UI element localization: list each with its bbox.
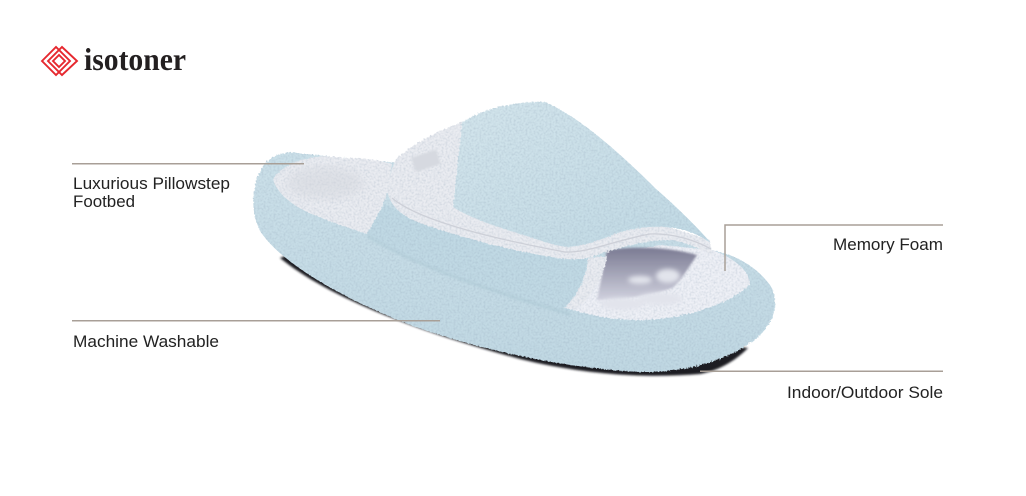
label: Luxurious Pillowstep <box>73 174 230 193</box>
leader line <box>725 225 943 271</box>
blue foam base <box>253 152 775 372</box>
heel footbed shading <box>287 167 363 199</box>
label: Indoor/Outdoor Sole <box>787 383 943 402</box>
embossed strap logo <box>411 150 441 172</box>
black outsole <box>280 250 748 376</box>
strap piping <box>392 198 711 252</box>
slipper illustration <box>253 102 775 376</box>
label: Machine Washable <box>73 332 219 351</box>
leader line <box>700 370 943 372</box>
callout: Luxurious Pillowstep Footbed <box>72 163 304 211</box>
upper strap white lining <box>387 122 712 259</box>
label second line: Footbed <box>73 192 135 211</box>
wordmark: isotoner <box>84 41 186 77</box>
strap edge to opening <box>564 256 607 310</box>
logo: isotoner <box>42 41 186 77</box>
heel footbed <box>273 156 392 234</box>
lower strap bottom shadow <box>367 236 570 314</box>
upper strap blue terry <box>453 102 711 247</box>
toe cushion bumps <box>600 269 682 310</box>
leader line <box>72 320 440 322</box>
toe footbed <box>574 245 750 320</box>
label: Memory Foam <box>833 235 943 254</box>
callout: Memory Foam <box>725 225 943 271</box>
icon: red nested diamonds <box>42 47 77 75</box>
leader line <box>72 163 304 164</box>
toe opening interior <box>597 248 697 300</box>
lower strap <box>367 204 592 312</box>
